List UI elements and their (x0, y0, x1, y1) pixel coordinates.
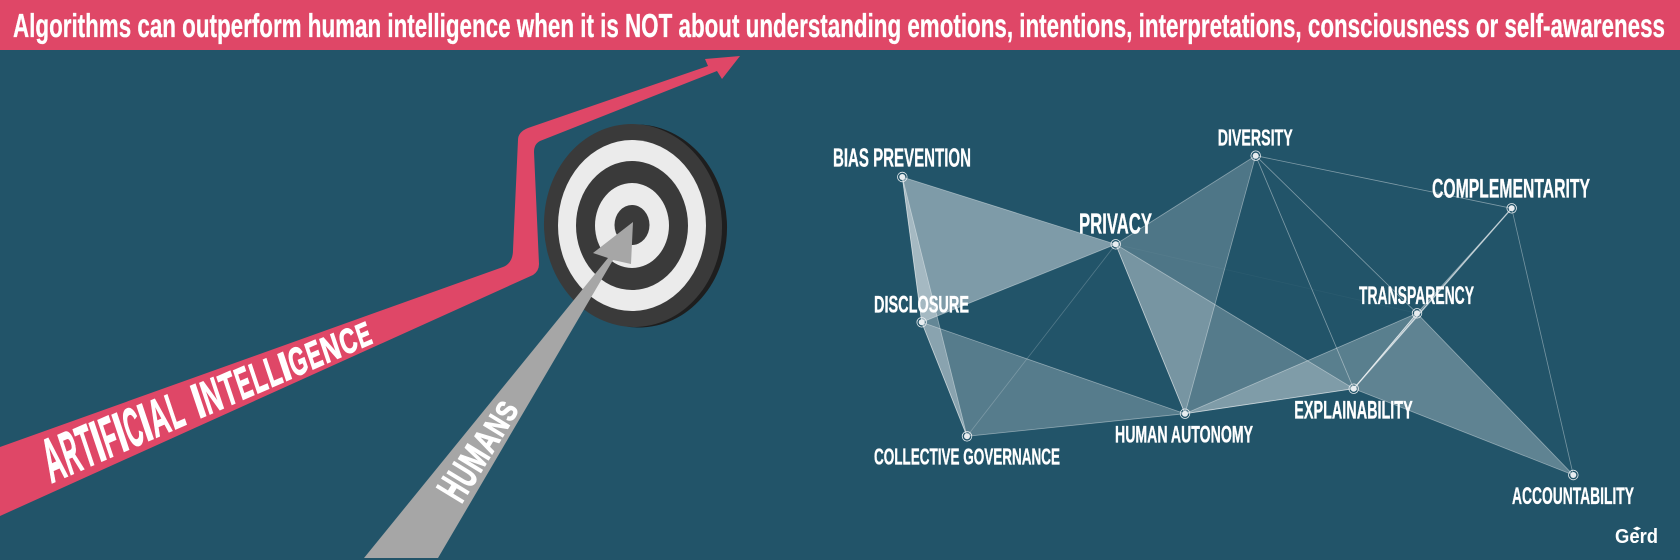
label: artificial intelligence: N (315, 325, 345, 371)
network: triangles (902, 156, 1573, 475)
network: labels: COLLECTIVE GOVERNANCE (874, 443, 1060, 469)
label: artificial intelligence: C (115, 394, 150, 460)
label: artificial intelligence: N (195, 368, 229, 425)
label: artificial intelligence: L (159, 380, 191, 440)
network: labels: EXPLAINABILITY (1294, 396, 1413, 424)
arrow: humans (364, 222, 633, 558)
label: humans: U (439, 456, 487, 494)
label: artificial intelligence: I (185, 374, 212, 429)
label: artificial intelligence: E (300, 332, 327, 378)
label: humans: M (451, 438, 499, 479)
network: thin links (967, 156, 1573, 475)
network: labels: PRIVACY (1079, 208, 1152, 240)
label: artificial intelligence: R (52, 417, 89, 488)
label: humans: A (465, 423, 508, 459)
label: artificial intelligence: I (83, 409, 113, 475)
network: labels: DIVERSITY (1218, 125, 1293, 151)
network: labels: HUMAN AUTONOMY (1115, 421, 1253, 448)
label: artificial intelligence: E (229, 357, 258, 410)
label: artificial intelligence: A (34, 424, 73, 497)
network: labels: TRANSPARENCY (1359, 282, 1474, 310)
label: artificial intelligence: F (92, 404, 126, 471)
label: artificial intelligence: I (105, 400, 135, 464)
network: labels (833, 125, 1634, 510)
label: humans: H (428, 470, 479, 510)
label: humans (428, 389, 528, 510)
label: artificial intelligence: E (351, 314, 376, 355)
label: humans: N (477, 409, 516, 442)
logo: Gerd: Gerd (1615, 526, 1658, 548)
label: humans: S (489, 396, 525, 427)
label: artificial intelligence: T (68, 411, 104, 481)
network: labels: DISCLOSURE (874, 291, 969, 318)
label: artificial intelligence: G (283, 338, 313, 386)
label: artificial intelligence (34, 291, 378, 497)
label: artificial intelligence: I (273, 343, 297, 390)
network diagram (833, 125, 1634, 510)
label: artificial intelligence: C (334, 320, 362, 363)
label: artificial intelligence: T (213, 362, 244, 416)
icon: target (539, 119, 732, 332)
label: artificial intelligence: L (244, 352, 273, 403)
network: labels: BIAS PREVENTION (833, 145, 971, 173)
arrow: artificial intelligence (0, 56, 740, 516)
label: artificial intelligence: I (131, 393, 159, 453)
label: artificial intelligence: A (141, 387, 177, 449)
label: artificial intelligence: L (259, 346, 287, 396)
network: nodes (898, 151, 1578, 480)
